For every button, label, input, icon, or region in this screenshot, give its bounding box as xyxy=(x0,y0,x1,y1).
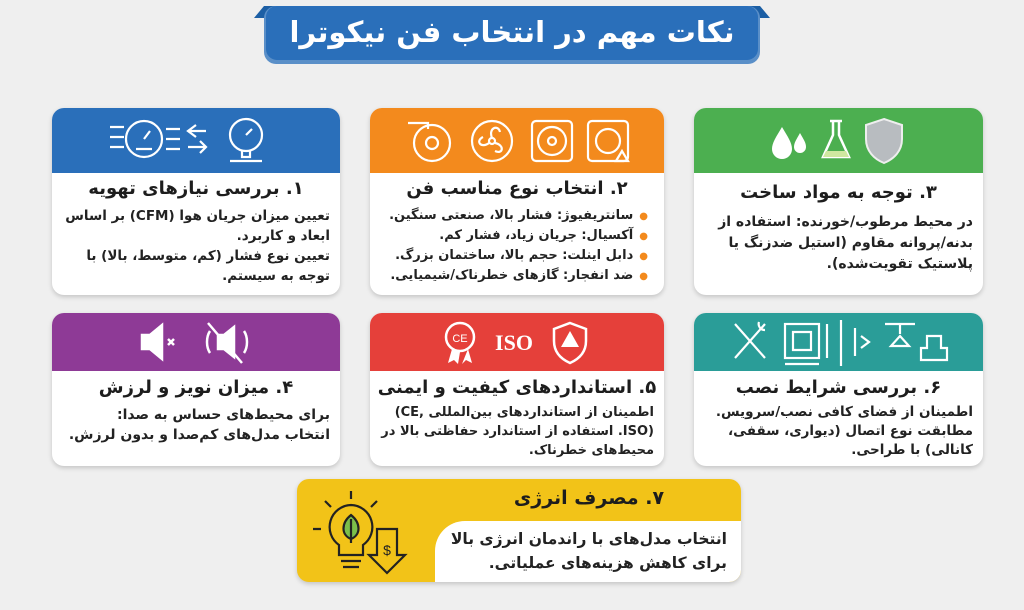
card 1: ventilation needs xyxy=(52,108,340,295)
heading: ۶. بررسی شرایط نصب xyxy=(736,377,941,398)
title banner xyxy=(254,6,770,64)
title banner: نکات مهم در انتخاب فن نیکوترا xyxy=(289,15,734,49)
text: تعیین میزان جریان هوا (CFM) بر اساس ابعاد و کاربرد. xyxy=(65,208,330,244)
heading: ۳. توجه به مواد ساخت xyxy=(740,182,937,203)
icon header: CE ISO shield: ISO xyxy=(495,330,533,355)
bullet list: آکسیال: جریان زیاد، فشار کم. xyxy=(439,228,633,243)
text: اطمینان از فضای کافی نصب/سرویس. مطابقت نوع اتصال (دیواری، سقفی، کانالی) با طراحی. xyxy=(716,404,973,458)
white text area xyxy=(435,521,741,582)
text: در محیط مرطوب/خورنده: استفاده از بدنه/پروانه مقاوم (استیل ضدزنگ یا پلاستیک تقویت‌شده). xyxy=(718,214,973,272)
card 5: standards xyxy=(370,313,664,466)
heading: ۵. استانداردهای کیفیت و ایمنی xyxy=(378,377,656,398)
heading: ۷. مصرف انرژی xyxy=(514,487,664,509)
icon header: fans xyxy=(370,108,664,173)
text: انتخاب مدل‌های کم‌صدا و بدون لرزش. xyxy=(69,427,330,443)
card 2: fan type xyxy=(370,108,664,295)
card 4: noise xyxy=(52,313,340,466)
icon header: muted speakers xyxy=(52,313,340,371)
icon header: tools xyxy=(694,313,983,371)
card 6: installation xyxy=(694,313,983,466)
card 3: materials xyxy=(694,108,983,295)
icon header: gauges xyxy=(52,108,340,173)
text: تعیین نوع فشار (کم، متوسط، بالا) با توجه به سیستم. xyxy=(86,248,330,284)
text: برای کاهش هزینه‌های عملیاتی. xyxy=(489,554,727,572)
icon: bulb with leaf and dollar arrow xyxy=(313,491,408,574)
text: انتخاب مدل‌های با راندمان انرژی بالا xyxy=(451,530,727,548)
icon header: CE ISO shield xyxy=(370,313,664,371)
text xyxy=(69,407,330,443)
icon header: CE ISO shield: CE xyxy=(452,333,468,345)
text: اطمینان از استانداردهای بین‌المللی (CE, ISO). استفاده از استاندارد حفاظتی بالا در محیط‌های خطرناک. xyxy=(381,405,654,458)
icon header: drops, flask, shield xyxy=(694,108,983,173)
text xyxy=(451,530,727,572)
heading: ۴. میزان نویز و لرزش xyxy=(99,377,293,398)
bullet list: دابل اینلت: حجم بالا، ساختمان بزرگ. xyxy=(395,248,633,263)
heading: ۱. بررسی نیازهای تهویه xyxy=(88,178,304,199)
bullet list xyxy=(389,207,648,283)
text: برای محیط‌های حساس به صدا: xyxy=(117,407,330,423)
text xyxy=(65,208,330,284)
bullet list: سانتریفیوژ: فشار بالا، صنعتی سنگین. xyxy=(389,208,633,223)
card 7: energy xyxy=(297,479,741,582)
bullet list: ضد انفجار: گازهای خطرناک/شیمیایی. xyxy=(390,268,633,283)
icon: bulb with leaf and dollar arrow: $ xyxy=(383,542,391,558)
heading: ۲. انتخاب نوع مناسب فن xyxy=(406,178,628,199)
